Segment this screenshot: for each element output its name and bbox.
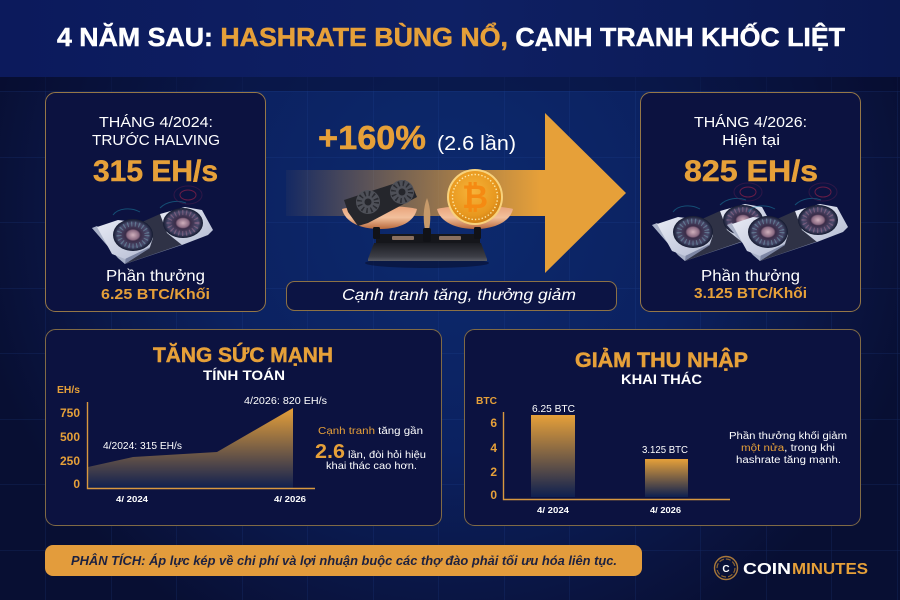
panel: April 2024 <box>46 92 266 312</box>
growth figure: (2.6 lần) <box>437 133 516 155</box>
chart note: hashrate tăng mạnh. <box>736 455 841 466</box>
panel: hashrate chart <box>46 330 442 526</box>
chart note: một nửa , trong khi <box>741 442 835 454</box>
chart note: Phần thưởng khối giảm <box>729 430 847 442</box>
area chart: 4/ 2024 <box>116 494 148 504</box>
bar chart: 0 <box>490 488 497 502</box>
area chart: 250 <box>60 454 80 468</box>
bar chart: 6 <box>490 416 497 430</box>
bitcoin coin: ₿ <box>462 178 488 216</box>
growth figure: +160% <box>318 119 426 156</box>
caption pill: Cạnh tranh tăng, thưởng giảm <box>342 287 576 304</box>
hashrate value 2024: 315 EH/s <box>93 155 218 188</box>
icon: balance scale with GPU and bitcoin <box>342 169 513 268</box>
center arrow <box>286 113 626 273</box>
icon: two GPUs <box>652 183 848 261</box>
period label 2024: THÁNG 4/2024: <box>99 114 213 131</box>
bar chart: 2 <box>490 465 497 479</box>
area chart: 750 <box>60 406 80 420</box>
bar chart: 4/ 2026 <box>650 505 681 515</box>
chart note <box>729 430 847 466</box>
area chart: 4/2026: 820 EH/s <box>244 395 327 407</box>
chart note: 2.6 <box>315 441 345 463</box>
reward 2024: 6.25 BTC/Khối <box>101 286 210 303</box>
logo: Coinminutes <box>714 556 868 580</box>
area chart: 0 <box>73 477 80 491</box>
logo: Coinminutes: MINUTES <box>792 561 868 578</box>
bar chart <box>476 395 730 515</box>
bitcoin coin <box>447 169 503 225</box>
area chart: EH/s <box>57 384 80 396</box>
bar chart: 4/ 2024 <box>537 505 569 515</box>
panel heading: TĂNG SỨC MẠNH <box>153 343 333 367</box>
bar chart: BTC <box>476 395 497 407</box>
area chart: 4/ 2026 <box>274 494 306 504</box>
panel: reward chart <box>464 330 860 526</box>
GPU on scale <box>344 180 417 226</box>
panel heading: TÍNH TOÁN <box>203 367 285 383</box>
icon: GPU <box>92 186 213 264</box>
period label 2024: TRƯỚC HALVING <box>92 132 220 149</box>
hashrate value 2026: 825 EH/s <box>684 155 818 188</box>
chart note: khai thác cao hơn. <box>326 460 417 472</box>
logo: Coinminutes: COIN <box>743 561 791 578</box>
panel heading: KHAI THÁC <box>621 371 702 387</box>
panel heading: GIẢM THU NHẬP <box>575 348 748 372</box>
chart note <box>315 425 426 472</box>
panel heading <box>575 348 748 387</box>
chart note: lần, đòi hỏi hiệu <box>348 449 426 461</box>
reward 2026: Phần thưởng <box>701 268 800 285</box>
bar chart: 4 <box>490 441 497 455</box>
area chart: 500 <box>60 430 80 444</box>
period label 2026 <box>694 114 807 149</box>
logo: Coinminutes: C <box>722 564 730 575</box>
panel heading <box>153 343 333 383</box>
reward 2026 <box>694 268 807 302</box>
analysis strip: PHÂN TÍCH: Áp lực kép về chi phí và lợi nhuận buộc các thợ đào phải tối ưu hóa liên tục. <box>71 553 617 568</box>
area chart <box>57 384 327 504</box>
title: 4 NĂM SAU: HASHRATE BÙNG NỔ, CẠNH TRANH KHỐC LIỆT <box>57 22 845 52</box>
area chart: 4/2024: 315 EH/s <box>103 440 182 452</box>
bar chart: 6.25 BTC <box>532 403 575 415</box>
period label 2026: Hiện tại <box>722 132 780 149</box>
reward 2024: Phần thưởng <box>106 268 205 285</box>
reward 2026: 3.125 BTC/Khối <box>694 285 807 302</box>
caption pill <box>286 282 616 310</box>
growth figure <box>318 119 516 156</box>
panel: April 2026 <box>640 92 860 312</box>
period label 2024 <box>92 114 220 149</box>
period label 2026: THÁNG 4/2026: <box>694 114 807 131</box>
chart note: Cạnh tranh tăng gần <box>318 425 423 437</box>
reward 2024 <box>101 268 210 303</box>
analysis strip <box>45 545 642 576</box>
bar chart: 3.125 BTC <box>642 444 688 456</box>
header band <box>0 0 900 91</box>
